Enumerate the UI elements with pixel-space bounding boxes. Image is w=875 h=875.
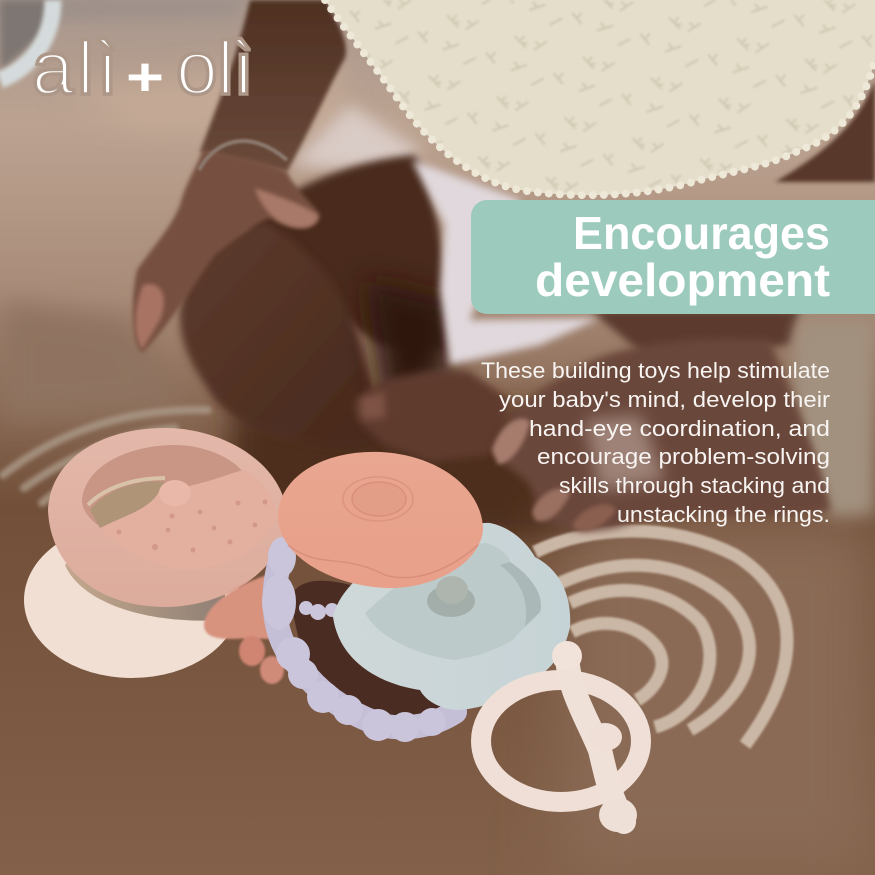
blue-grey cloud ring — [333, 523, 570, 710]
bib — [325, 0, 875, 195]
body text: hand-eye coordination, and — [529, 416, 830, 441]
raised arm — [200, 0, 346, 172]
brand logo: olì — [176, 26, 254, 110]
lavender beaded ring — [262, 537, 460, 742]
white object corner, top left — [0, 0, 53, 80]
baby body — [180, 0, 875, 518]
coral disc — [278, 452, 483, 588]
mat rainbow print, left — [3, 410, 208, 503]
cream teething ring with stem — [481, 641, 641, 832]
thigh and torso — [245, 155, 446, 350]
heading: Encourages — [573, 207, 830, 259]
heading: development — [535, 254, 830, 306]
heading panel — [471, 200, 875, 314]
foot and far hand — [355, 339, 830, 532]
white ring, large — [24, 522, 240, 678]
brand logo: alì — [32, 26, 118, 110]
bracelet — [199, 141, 287, 170]
baby foot behind toys — [204, 572, 285, 684]
heading — [535, 207, 830, 306]
pink ring with rainbow inset — [48, 428, 287, 607]
body text: unstacking the rings. — [617, 502, 830, 527]
body text: encourage problem-solving — [537, 444, 830, 469]
body text — [481, 358, 830, 527]
body text: These building toys help stimulate — [481, 358, 830, 383]
brand logo: + — [126, 47, 164, 107]
right arm top — [775, 80, 875, 182]
body text: your baby's mind, develop their — [499, 387, 830, 412]
mat rainbow print, right — [535, 531, 787, 745]
near leg — [180, 222, 380, 448]
diaper — [412, 160, 600, 365]
pale mat at right — [792, 318, 875, 518]
pale mat print behind arm — [290, 105, 420, 175]
body text: skills through stacking and — [559, 473, 830, 498]
brand logo — [32, 26, 254, 110]
shadow under crotch — [365, 280, 450, 410]
left hand with bracelet — [133, 141, 320, 353]
